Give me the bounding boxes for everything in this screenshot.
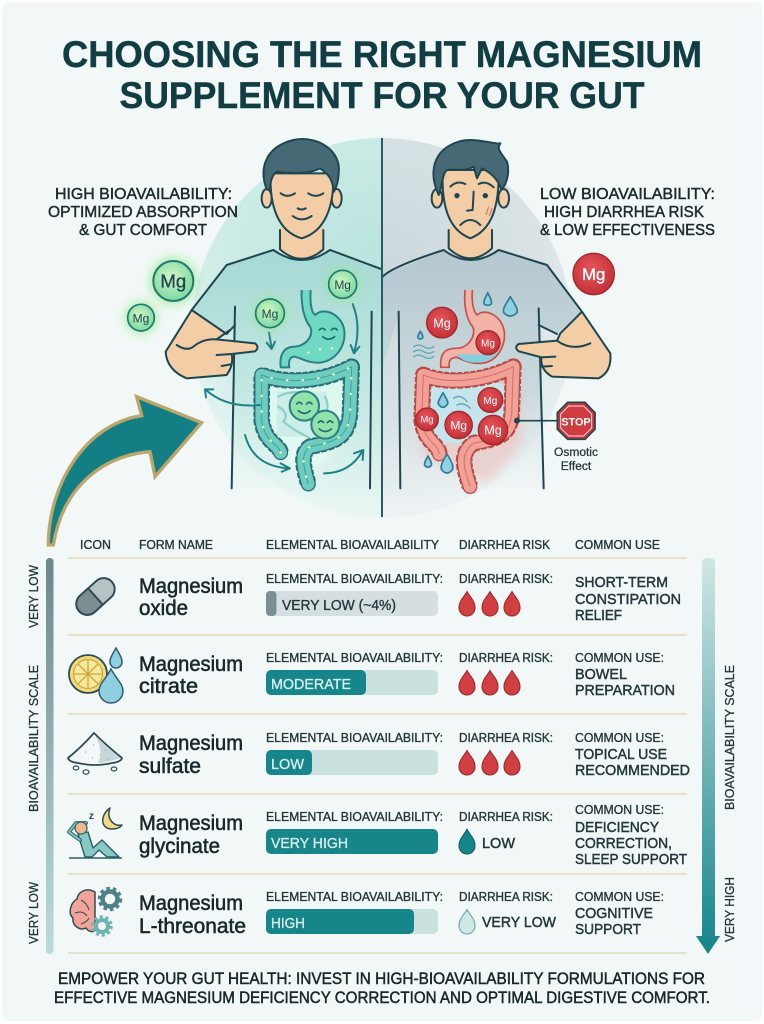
common use: DEFICIENCY xyxy=(575,820,659,836)
row: magnesium citrate xyxy=(69,648,675,703)
icon: reclining person and moon: z xyxy=(89,811,94,822)
face xyxy=(443,170,499,238)
bioavailability bar: ELEMENTAL BIOAVAILABILITY: xyxy=(266,572,443,586)
form name: Magnesium xyxy=(139,575,243,598)
form name xyxy=(139,892,246,938)
gut glow xyxy=(262,367,352,480)
icon: reclining person and moon xyxy=(69,808,122,858)
red Mg molecules: Mg xyxy=(484,424,502,438)
common use: COMMON USE: xyxy=(575,731,664,745)
bioavailability bar: ELEMENTAL BIOAVAILABILITY: xyxy=(266,890,443,904)
form name: sulfate xyxy=(139,755,201,778)
title: CHOOSING THE RIGHT MAGNESIUM xyxy=(62,34,702,75)
bioavailability bar: LOW xyxy=(271,757,304,773)
diarrhea risk: very low: DIARRHEA RISK: xyxy=(459,890,553,904)
common use: COMMON USE: xyxy=(575,651,664,665)
footer message: EMPOWER YOUR GUT HEALTH: INVEST IN HIGH-BIOAVAILABILITY FORMULATIONS FOR xyxy=(58,970,705,988)
stomach xyxy=(441,290,504,367)
arrow: large teal curved arrow xyxy=(48,397,202,545)
row: magnesium oxide xyxy=(72,572,681,624)
diarrhea risk: low: LOW xyxy=(482,836,515,852)
bioavailability bar: ELEMENTAL BIOAVAILABILITY: xyxy=(266,810,443,824)
form name xyxy=(139,653,243,698)
callout: high bioavailability xyxy=(48,186,238,239)
arm pointing xyxy=(516,312,611,378)
arm pointing xyxy=(166,310,257,378)
right bioavailability scale arrow: BIOAVAILABILITY SCALE xyxy=(723,665,737,810)
common use: RECOMMENDED xyxy=(575,763,690,779)
callout: low bioavailability xyxy=(540,186,715,239)
divider line between halves xyxy=(381,138,383,517)
diarrhea risk: high: DIARRHEA RISK: xyxy=(459,572,553,586)
table header xyxy=(80,538,660,552)
red Mg molecules: Mg xyxy=(450,418,467,432)
face xyxy=(271,173,333,238)
common use: COGNITIVE xyxy=(575,906,653,922)
ears xyxy=(262,189,272,208)
icon: citrus and water drops xyxy=(69,648,123,703)
neck xyxy=(280,227,323,259)
callout: high bioavailability: & GUT COMFORT xyxy=(79,222,208,239)
right bioavailability scale arrow: VERY HIGH xyxy=(723,877,737,942)
bioavailability bar xyxy=(266,890,443,934)
form name: Magnesium xyxy=(139,892,243,915)
Mg glowing molecules xyxy=(124,257,359,334)
bioavailability bar: ELEMENTAL BIOAVAILABILITY: xyxy=(266,731,443,745)
form name xyxy=(139,575,243,620)
red Mg molecules: Mg xyxy=(483,396,497,407)
footer message: EFFECTIVE MAGNESIUM DEFICIENCY CORRECTION AND OPTIMAL DIGESTIVE COMFORT. xyxy=(54,989,710,1007)
illustration: unwell person with inflamed gut xyxy=(382,140,614,488)
callout: low bioavailability: HIGH DIARRHEA RISK xyxy=(544,204,705,221)
small intestine xyxy=(277,392,327,438)
table header: ELEMENTAL BIOAVAILABILITY xyxy=(266,538,440,552)
common use: COMMON USE: xyxy=(575,890,664,904)
left bioavailability scale xyxy=(27,558,54,954)
stop sign callout: osmotic effect: Osmotic xyxy=(554,445,598,459)
form name xyxy=(139,732,243,778)
common use: SUPPORT xyxy=(575,922,641,938)
diarrhea risk: low xyxy=(459,810,553,854)
bioavailability bar xyxy=(266,810,443,854)
panel: high bioavailability half circle xyxy=(192,138,382,518)
icon: brain and gears xyxy=(70,888,120,935)
diarrhea risk: very low: VERY LOW xyxy=(482,915,556,931)
table header: ICON xyxy=(80,538,111,552)
form name: glycinate xyxy=(139,835,220,858)
diarrhea risk: high xyxy=(459,651,553,695)
red Mg molecules xyxy=(416,253,614,445)
Mg glowing molecules: Mg xyxy=(160,271,186,292)
form name: L-threonate xyxy=(139,915,246,938)
row: magnesium L-threonate xyxy=(70,888,664,938)
stomach xyxy=(280,290,344,367)
common use: CONSTIPATION xyxy=(575,592,681,608)
diarrhea risk: high xyxy=(459,731,553,775)
table header: FORM NAME xyxy=(139,538,213,552)
Mg glowing molecules: Mg xyxy=(262,307,278,321)
left bioavailability scale: VERY LOW xyxy=(27,565,41,628)
common use: SLEEP SUPPORT xyxy=(575,852,687,868)
row: magnesium glycinate xyxy=(69,803,687,868)
shirt xyxy=(192,250,382,488)
bioavailability bar xyxy=(266,572,443,616)
common use: TOPICAL USE xyxy=(575,747,667,763)
red Mg molecules: Mg xyxy=(582,265,605,284)
form name: Magnesium xyxy=(139,812,243,835)
bioavailability bar: MODERATE xyxy=(271,677,351,693)
diarrhea risk: high xyxy=(459,572,553,616)
diarrhea risk: very low xyxy=(459,890,556,934)
title xyxy=(62,34,702,116)
red Mg molecules: Mg xyxy=(421,415,433,425)
bioavailability bar: ELEMENTAL BIOAVAILABILITY: xyxy=(266,651,443,665)
panel: low bioavailability half circle xyxy=(382,138,572,518)
shirt xyxy=(382,250,582,488)
icon: powder pile xyxy=(68,733,122,774)
callout: high bioavailability: OPTIMIZED ABSORPTION xyxy=(48,204,238,221)
common use: BOWEL xyxy=(575,667,627,683)
title: SUPPLEMENT FOR YOUR GUT xyxy=(120,75,645,116)
bioavailability bar: HIGH xyxy=(271,916,305,932)
colon xyxy=(262,367,352,484)
illustration: healthy person with teal gut xyxy=(124,139,382,488)
table header: COMMON USE xyxy=(575,538,660,552)
Mg glowing molecules: Mg xyxy=(133,311,149,325)
bioavailability bar: VERY HIGH xyxy=(271,836,348,852)
water drops xyxy=(418,293,517,473)
bioavailability bar xyxy=(266,651,443,695)
Mg glowing molecules: Mg xyxy=(334,278,351,292)
common use xyxy=(575,651,675,699)
colon xyxy=(422,367,513,487)
neck xyxy=(449,227,492,258)
left bioavailability scale: BIOAVAILABILITY SCALE xyxy=(27,665,41,812)
callout: high bioavailability: HIGH BIOAVAILABILITY: xyxy=(55,186,232,203)
inner watery area xyxy=(430,383,505,443)
stop sign callout: osmotic effect: STOP xyxy=(561,416,591,428)
left bioavailability scale: VERY LOW xyxy=(27,882,41,944)
common use: COMMON USE: xyxy=(575,803,664,817)
form name: oxide xyxy=(139,597,188,620)
form name: Magnesium xyxy=(139,653,243,676)
callout: low bioavailability: & LOW EFFECTIVENESS xyxy=(540,222,715,239)
bioavailability bar xyxy=(266,731,443,775)
common use: CORRECTION, xyxy=(575,836,672,852)
red Mg molecules: Mg xyxy=(433,316,451,330)
icon: capsule xyxy=(72,574,119,619)
common use xyxy=(575,731,690,779)
diarrhea risk: low: DIARRHEA RISK: xyxy=(459,810,553,824)
red Mg molecules: Mg xyxy=(481,339,495,350)
common use: PREPARATION xyxy=(575,683,675,699)
bioavailability bar: VERY LOW (~4%) xyxy=(282,598,396,614)
footer message xyxy=(54,970,710,1007)
ears xyxy=(432,189,442,208)
common use: SHORT-TERM xyxy=(575,575,668,591)
right bioavailability scale arrow xyxy=(696,558,737,954)
happy microbes xyxy=(290,391,339,439)
form name: Magnesium xyxy=(139,732,243,755)
common use xyxy=(575,890,664,938)
table header: DIARRHEA RISK xyxy=(459,538,551,552)
callout: low bioavailability: LOW BIOAVAILABILITY: xyxy=(540,186,715,203)
diarrhea risk: high: DIARRHEA RISK: xyxy=(459,651,553,665)
form name xyxy=(139,812,243,858)
form name: citrate xyxy=(139,675,198,698)
common use xyxy=(575,803,687,868)
stop sign callout: osmotic effect: Effect xyxy=(561,459,592,473)
stop sign callout: osmotic effect xyxy=(514,402,598,473)
diarrhea risk: high: DIARRHEA RISK: xyxy=(459,731,553,745)
gut inflammation glow xyxy=(419,363,522,483)
row: magnesium sulfate xyxy=(68,731,690,779)
flow arrows xyxy=(205,304,363,473)
common use xyxy=(575,575,681,624)
common use: RELIEF xyxy=(575,608,622,624)
